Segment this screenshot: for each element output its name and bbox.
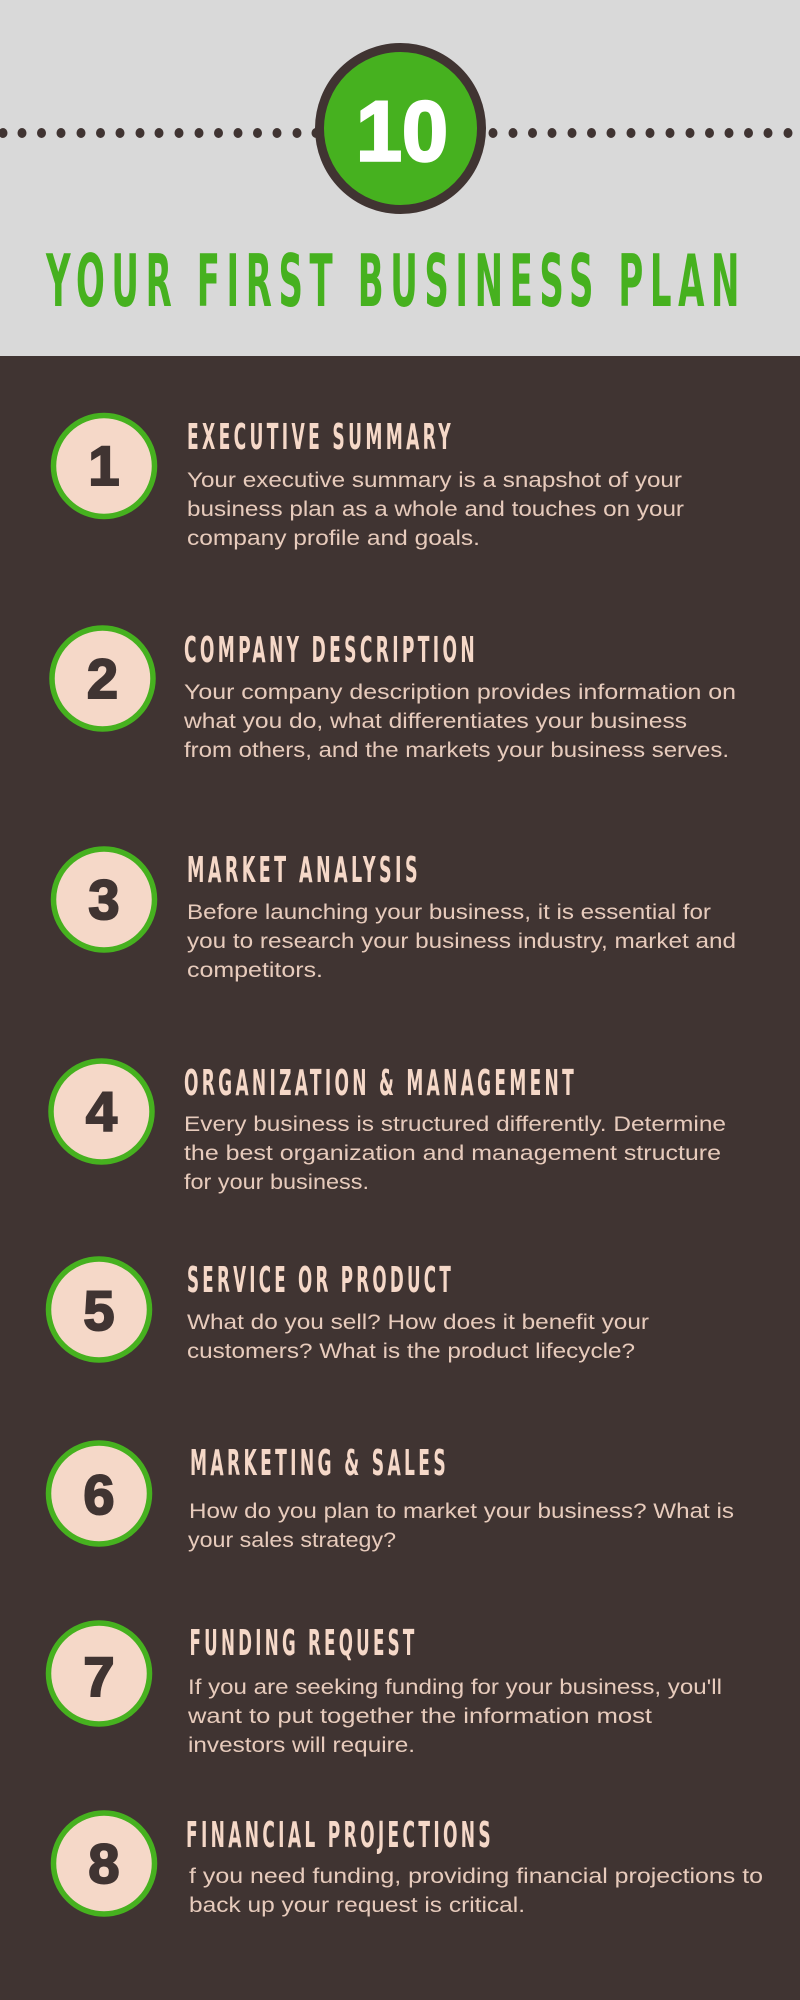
badge: number 10: 10 [356, 84, 448, 180]
body 1 [187, 468, 684, 550]
body 7: If you are seeking funding for your business, you'll [188, 1675, 722, 1699]
body 1: business plan as a whole and touches on your [187, 497, 684, 521]
body 4: Every business is structured differently. Determine [184, 1112, 726, 1136]
body 6 [188, 1499, 734, 1552]
body 2: from others, and the markets your business serves. [184, 738, 729, 762]
body 3 [187, 900, 736, 982]
item 4: organization and management [51, 1061, 726, 1194]
number badge 4 [51, 1061, 152, 1162]
body 2: what you do, what differentiates your business [183, 709, 687, 733]
body 1: Your executive summary is a snapshot of your [187, 468, 682, 492]
body 5 [187, 1310, 649, 1363]
dotted line [0, 128, 792, 138]
body 6: How do you plan to market your business? What is [189, 1499, 734, 1523]
number badge 6: 6 [83, 1463, 115, 1526]
number badge 3: 3 [88, 868, 120, 931]
body 7 [187, 1675, 722, 1757]
body 2: Your company description provides information on [184, 680, 736, 704]
body 6: your sales strategy? [188, 1528, 396, 1552]
item 7: funding request [48, 1623, 722, 1757]
item 1: executive summary [54, 416, 684, 550]
body 1: company profile and goals. [187, 526, 480, 550]
body 3: competitors. [187, 958, 323, 982]
item 7: funding request: FUNDING REQUEST [190, 1623, 418, 1664]
item 2: company description [52, 628, 736, 762]
number badge 2 [52, 628, 153, 729]
item 1: executive summary: EXECUTIVE SUMMARY [187, 417, 454, 458]
number badge 5 [48, 1259, 150, 1360]
body 8: f you need funding, providing financial projections to [189, 1864, 763, 1888]
number badge 8: 8 [88, 1832, 120, 1895]
badge: number 10 [320, 48, 482, 210]
body 5: What do you sell? How does it benefit your [187, 1310, 649, 1334]
body 4 [184, 1112, 726, 1194]
item 2: company description: COMPANY DESCRIPTION [184, 630, 478, 671]
body 3: you to research your business industry, market and [187, 929, 736, 953]
number badge 2: 2 [87, 647, 118, 710]
number badge 7: 7 [83, 1645, 115, 1708]
number badge 8 [54, 1813, 154, 1914]
number badge 7 [48, 1623, 150, 1724]
item 3: market analysis [54, 849, 736, 982]
item 5: service or product: SERVICE OR PRODUCT [187, 1260, 454, 1301]
body 3: Before launching your business, it is essential for [187, 900, 711, 924]
number badge 1 [54, 416, 154, 516]
body 8: back up your request is critical. [189, 1893, 525, 1917]
body 4: the best organization and management structure [184, 1141, 721, 1165]
number badge 1: 1 [88, 434, 120, 497]
body 7: want to put together the information most [187, 1704, 652, 1728]
item 5: service or product [48, 1259, 649, 1363]
body 8 [189, 1864, 763, 1917]
panel: header [0, 0, 800, 356]
body 2 [183, 680, 736, 762]
number badge 4: 4 [86, 1080, 117, 1143]
number badge 5: 5 [83, 1279, 115, 1342]
body 4: for your business. [184, 1170, 369, 1194]
item 3: market analysis: MARKET ANALYSIS [187, 850, 421, 891]
body 7: investors will require. [188, 1733, 415, 1757]
body 5: customers? What is the product lifecycle? [187, 1339, 635, 1363]
item 6: marketing and sales [48, 1443, 734, 1552]
item 8: financial projections [54, 1813, 763, 1917]
number badge 3 [54, 849, 154, 950]
number badge 6 [48, 1443, 150, 1544]
item 6: marketing and sales: MARKETING & SALES [190, 1443, 449, 1484]
